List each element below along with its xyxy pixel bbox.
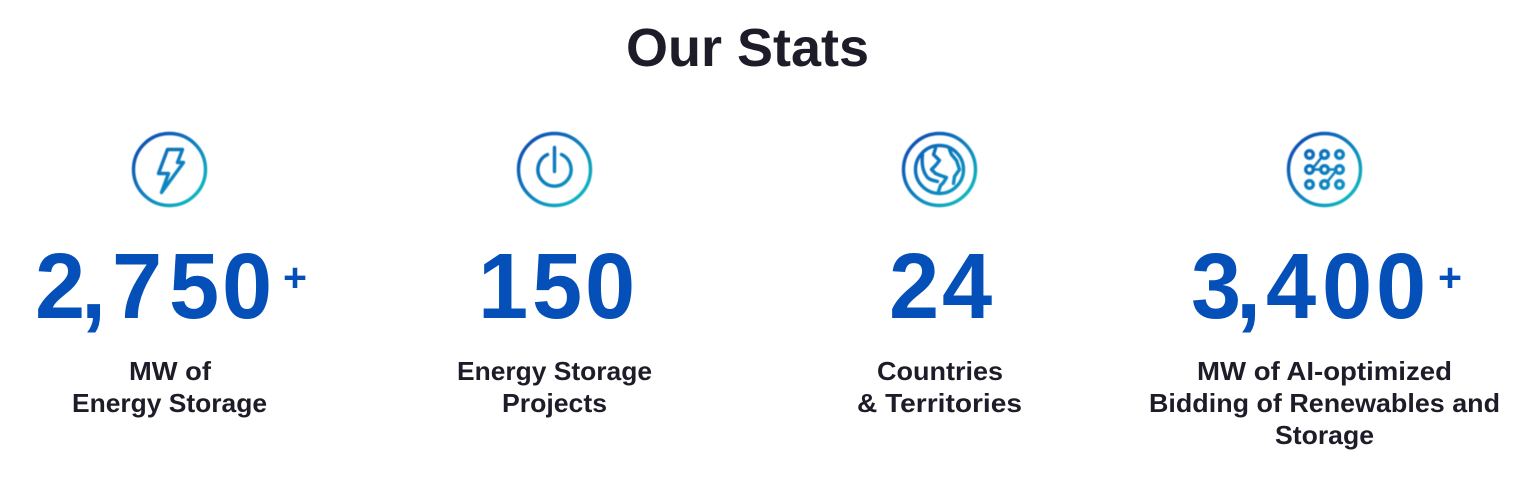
panel: energy storage projects — [457, 134, 652, 418]
panel: MW of energy storage — [35, 134, 307, 418]
panel: countries and territories — [857, 134, 1022, 418]
label: Projects — [502, 388, 607, 418]
icon: connected dots — [1288, 134, 1360, 206]
label: Energy Storage — [457, 356, 652, 386]
label — [1149, 356, 1500, 450]
number: 150: 150 — [478, 235, 635, 338]
number: 24: 24 — [889, 235, 992, 338]
panel: AI-optimized bidding — [1149, 134, 1500, 450]
icon: lightning bolt — [134, 134, 206, 206]
number: 3,400: 3,400 — [1191, 235, 1426, 338]
plus sign: + — [1438, 256, 1462, 300]
label: Energy Storage — [72, 388, 267, 418]
label — [457, 356, 652, 418]
number: 2,750: 2,750 — [35, 235, 272, 338]
label: & Territories — [857, 388, 1022, 418]
label: Bidding of Renewables and — [1149, 388, 1500, 418]
icon: power button — [518, 134, 590, 206]
label — [857, 356, 1022, 418]
icon: globe — [904, 134, 976, 206]
label: MW of AI-optimized — [1197, 356, 1452, 386]
label — [72, 356, 267, 418]
plus sign: + — [283, 256, 307, 300]
label: MW of — [129, 356, 211, 386]
label: Countries — [877, 356, 1003, 386]
title: Our Stats — [626, 18, 869, 78]
label: Storage — [1275, 420, 1374, 450]
